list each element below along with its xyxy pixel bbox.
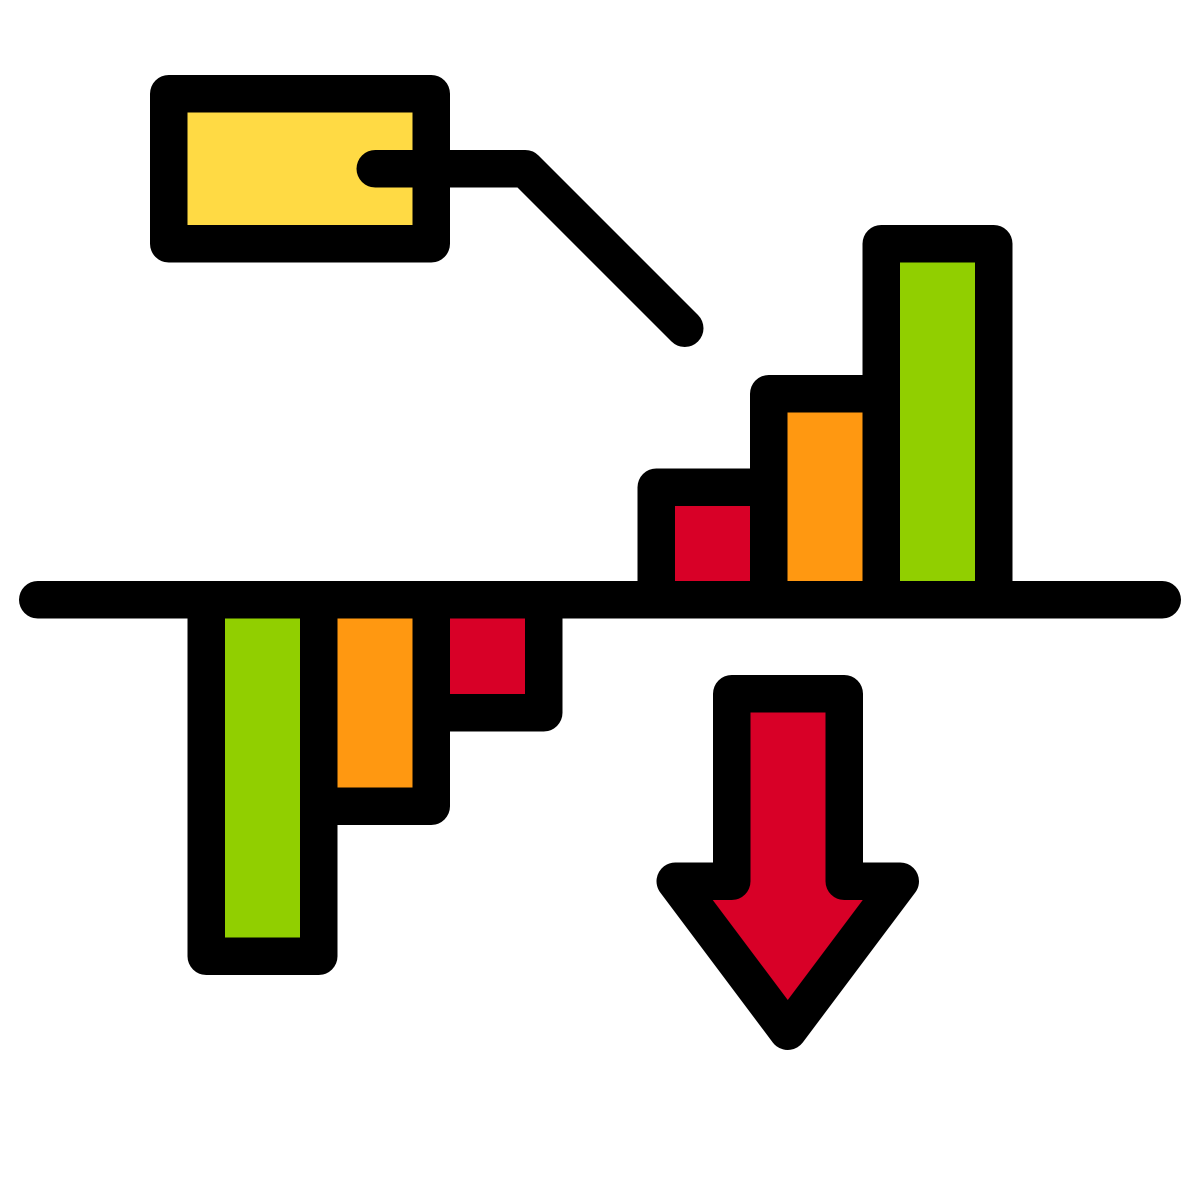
- icon: yellow price tag: [169, 94, 685, 328]
- bar chart: negative bars: [206, 600, 544, 956]
- bar chart: positive bars: [656, 244, 994, 600]
- axis line: [38, 581, 1162, 618]
- icon: red down arrow: [675, 694, 900, 1031]
